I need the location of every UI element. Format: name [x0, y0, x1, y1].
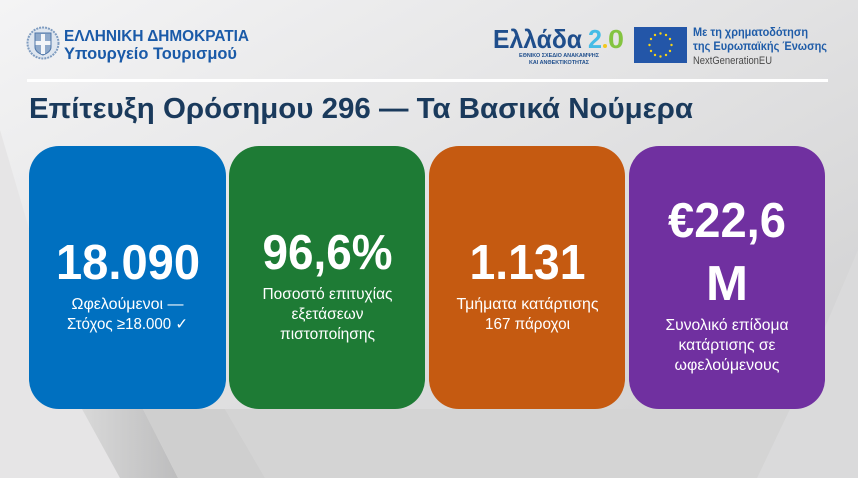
panel: training classes: 167 πάροχοι: [485, 316, 570, 333]
title: Επίτευξη Ορόσημου 296 — Τα Βασικά Νούμερα: [29, 93, 693, 125]
panel: training allowance: ωφελούμενους: [674, 357, 780, 374]
number: 18.090: 18.090: [56, 236, 200, 290]
logo: Hellenic Republic Ministry of Tourism: Υπουργείο Τουρισμού: [64, 45, 237, 63]
panel: pass rate: εξετάσεων: [292, 306, 364, 323]
panel: beneficiaries: [29, 146, 226, 409]
logo: Greece 2.0: 2: [588, 24, 602, 54]
panel: beneficiaries: Στόχος ≥18.000 ✓: [67, 316, 188, 333]
panel: pass rate: [229, 146, 425, 409]
panel: training allowance: [629, 146, 825, 409]
funding text: Με τη χρηματοδότηση: [693, 27, 808, 39]
logo: EU flag with funding statement: της Ευρωπαϊκής Ένωσης: [693, 41, 827, 53]
label: classes and providers: Τμήματα κατάρτισης: [456, 296, 598, 313]
logo: Greece 2.0: [493, 24, 624, 66]
number: 1.131: 1.131: [470, 236, 586, 290]
logo: EU flag with funding statement: [634, 27, 827, 67]
panel: pass rate: πιστοποίησης: [280, 326, 375, 343]
logo: Greece 2.0: 0: [608, 24, 624, 54]
logo: Greece 2.0: Ελλάδα: [493, 24, 582, 54]
number: 96,6%: 96,6%: [262, 226, 392, 280]
icon: EU flag: [634, 27, 687, 63]
logo: Hellenic Republic Ministry of Tourism: [28, 28, 249, 63]
panel: training allowance: M: [706, 257, 748, 311]
logo: Greece 2.0: ΕΘΝΙΚΟ ΣΧΕΔΙΟ ΑΝΑΚΑΜΨΗΣ: [519, 53, 600, 59]
label: pass rate: Ποσοστό επιτυχίας: [262, 286, 392, 303]
ministry name: ΕΛΛΗΝΙΚΗ ΔΗΜΟΚΡΑΤΙΑ: [64, 28, 249, 45]
panel: training allowance: κατάρτισης σε: [678, 337, 776, 354]
logo: EU flag with funding statement: NextGenerationEU: [693, 55, 772, 67]
icon: coat of arms: [28, 28, 58, 58]
label: total allowance: Συνολικό επίδομα: [666, 317, 789, 334]
logo: Greece 2.0: ΚΑΙ ΑΝΘΕΚΤΙΚΟΤΗΤΑΣ: [529, 60, 590, 66]
number: €22,6 M: €22,6: [668, 194, 786, 248]
panel: training classes: [429, 146, 625, 409]
label: beneficiaries: Ωφελούμενοι —: [72, 296, 184, 313]
